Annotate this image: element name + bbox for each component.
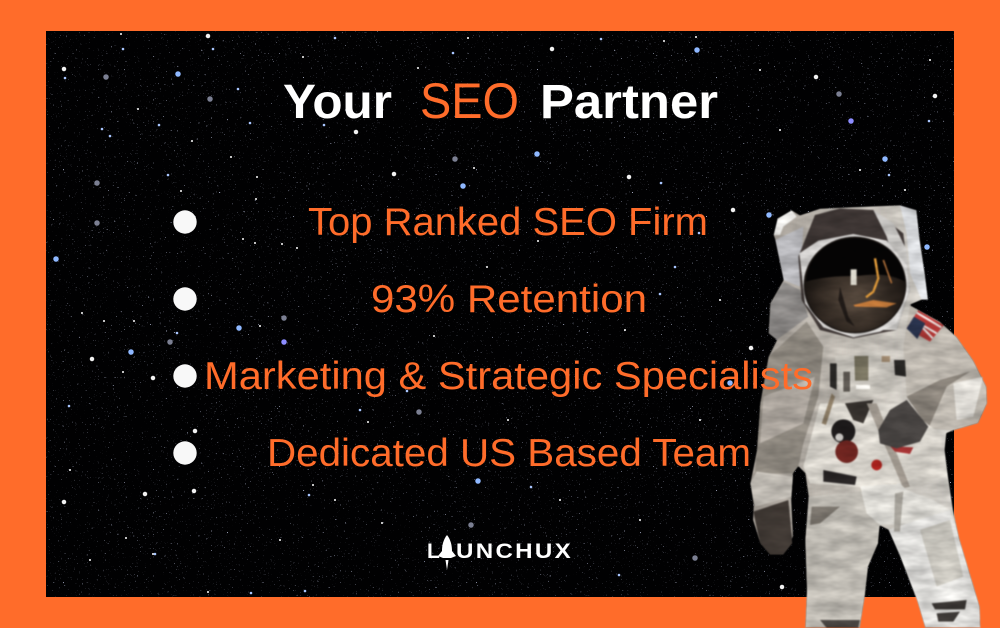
bullets xyxy=(173,210,197,465)
astronaut xyxy=(750,205,987,628)
red and dark controls xyxy=(831,419,855,443)
list item: 93% Retention: 93% Retention xyxy=(371,278,647,321)
chest pack xyxy=(835,350,895,400)
torso xyxy=(803,403,947,490)
title xyxy=(283,73,718,129)
logo: LaunchUX: UNCHUX xyxy=(456,540,573,563)
list item: Top Ranked SEO Firm: Top Ranked SEO Firm xyxy=(308,201,708,244)
title: SEO xyxy=(420,73,519,129)
glove: right hand xyxy=(878,400,928,448)
list item: Dedicated US Based Team: Dedicated US Based Team xyxy=(267,432,751,475)
title: Partner xyxy=(540,76,718,129)
logo: LaunchUX: L xyxy=(427,540,440,563)
backpack shading xyxy=(768,282,808,340)
list item: Marketing & Strategic Specialists: Marketing & Strategic Specialists xyxy=(204,355,813,398)
glove: left hand xyxy=(753,500,793,555)
icon: rocket xyxy=(438,535,456,570)
right arm xyxy=(903,305,987,431)
title: Your xyxy=(283,76,392,129)
hip and legs xyxy=(805,492,880,628)
left arm shading xyxy=(755,322,823,473)
logo: LaunchUX xyxy=(427,535,573,570)
flag xyxy=(907,310,944,342)
helmet xyxy=(798,208,910,338)
visor xyxy=(804,237,906,333)
